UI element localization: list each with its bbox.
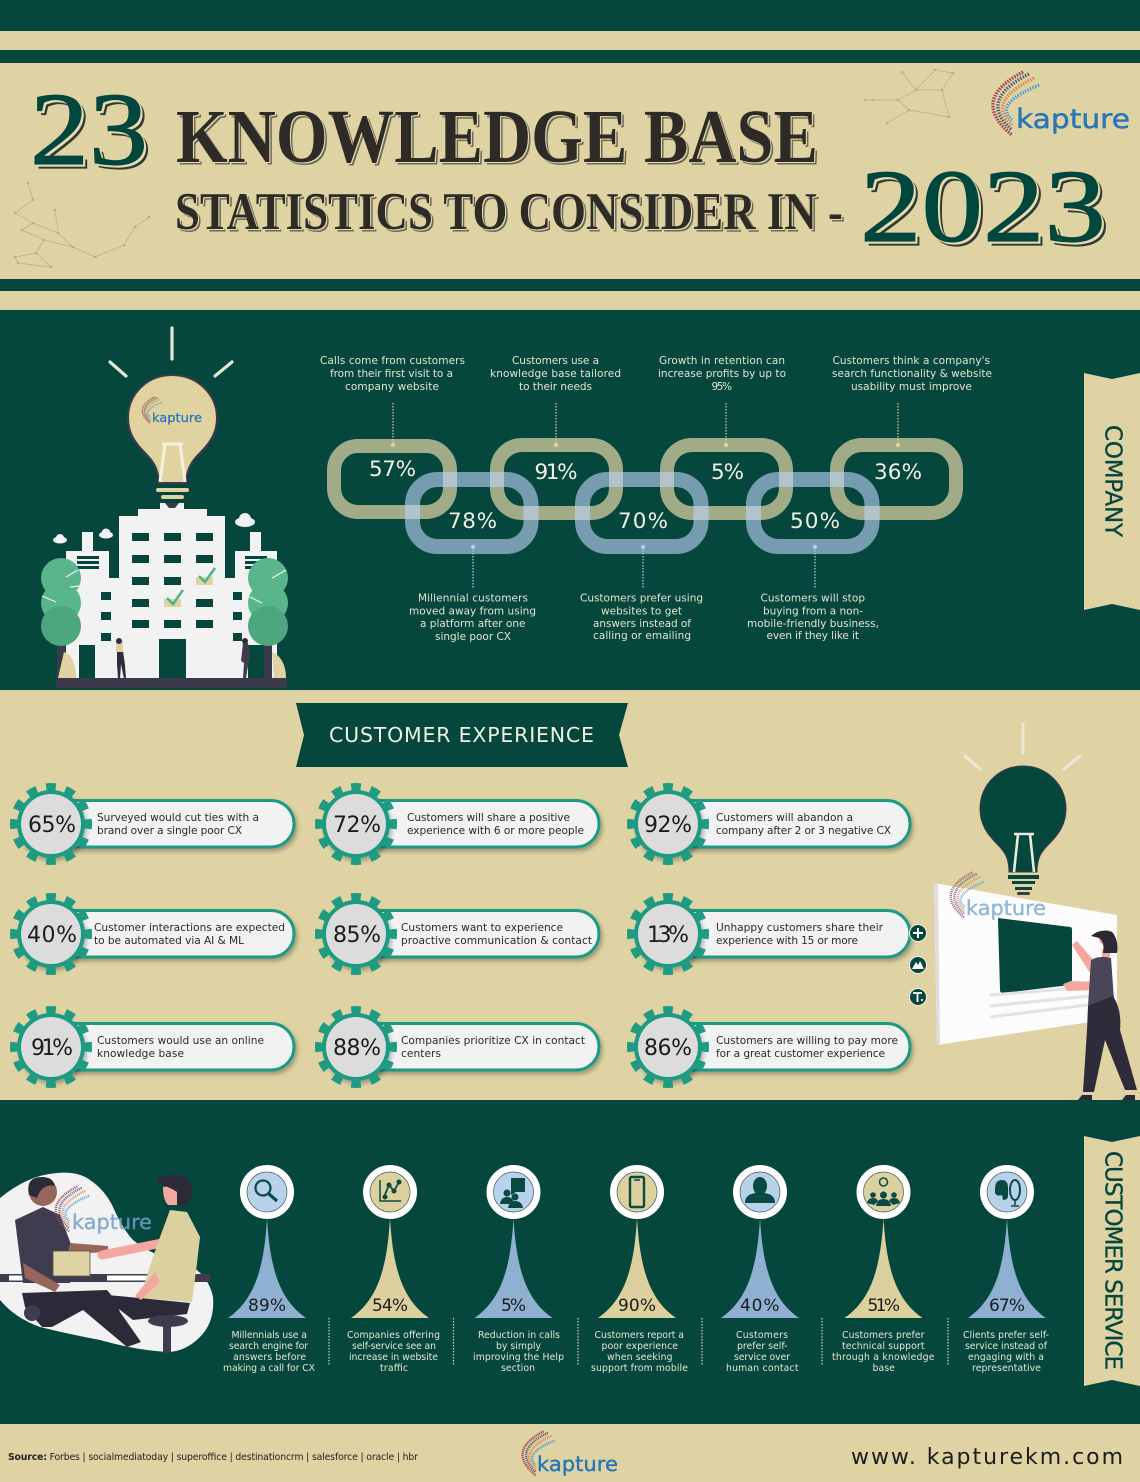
stat: 54% (347, 1168, 440, 1374)
card: 85%: 85% (333, 923, 381, 948)
kapture logo, top right: kapture (1016, 104, 1130, 135)
card: 40%: 40% (27, 923, 77, 948)
stat: 51%: through a knowledge (832, 1352, 935, 1363)
card: 85% (320, 898, 599, 970)
trees (41, 558, 288, 678)
card: 92%: company after 2 or 3 negative CX (716, 825, 891, 837)
source line: Source: Forbes | socialmediatoday | superoffice | destinationcrm | salesforce | oracle | hbr (8, 1452, 418, 1463)
company percentages: 70% (618, 509, 668, 534)
text: 57% calls from customers (320, 355, 465, 393)
stat: 51% (832, 1168, 935, 1374)
decorative molecule right (865, 70, 953, 123)
card: 13% (632, 898, 910, 970)
card: 91%: Customers would use an online (97, 1035, 264, 1047)
text: 91% knowledge base: knowledge base tailored (490, 368, 621, 380)
stat: 40% (721, 1168, 799, 1374)
text: 36% search (832, 355, 992, 393)
card: 88% (320, 1010, 599, 1084)
card: 65%: 65% (28, 813, 76, 838)
text: 70% websites: Customers prefer using (580, 592, 703, 604)
stat: 90%: 90% (618, 1296, 656, 1316)
stat: 89%: 89% (248, 1296, 286, 1316)
text: 5% retention: 95% (712, 381, 732, 393)
company percentages: 78% (448, 509, 497, 534)
icon: magnifier (256, 1180, 277, 1201)
company percentages: 50% (790, 509, 840, 534)
stat: 67% (963, 1168, 1049, 1374)
seated person right (102, 1175, 200, 1353)
rays (110, 328, 232, 376)
footer (8, 1431, 1123, 1476)
card: 85%: Customers want to experience (401, 922, 563, 934)
kapture logo, footer: kapture (537, 1452, 618, 1476)
card: 13%: experience with 15 or more (716, 935, 858, 947)
card: 72%: Customers will share a positive (407, 812, 570, 824)
ribbon: company (1084, 373, 1140, 610)
heading banner: customer experience (296, 703, 628, 767)
kapture logo on illustration: kapture (72, 1210, 152, 1234)
card: 65% (14, 788, 294, 860)
text: 50% mobile: even if they like it (766, 630, 859, 642)
illustration: handshake over laptop (0, 1173, 213, 1353)
card: 88%: 88% (333, 1036, 381, 1061)
stat: 40%: 40% (740, 1296, 780, 1316)
card: 92%: 92% (644, 813, 692, 838)
stat: 67%: Clients prefer self- (963, 1330, 1049, 1341)
website: www. kapturekm.com (851, 1445, 1123, 1470)
illustration: dark lightbulb and presenter at whiteboard (910, 724, 1137, 1100)
stat: 90%: when seeking (607, 1352, 673, 1363)
stat: 67%: engaging with a (968, 1352, 1044, 1363)
title number 23: 23 (30, 72, 148, 187)
ribbon: customer service (1084, 1136, 1140, 1386)
panel: customer service (0, 1100, 1140, 1424)
icon: head and mirror (995, 1180, 1020, 1206)
text: 57% calls from customers: Calls come from customers (320, 355, 465, 367)
seated person left (15, 1177, 141, 1347)
card: 91%: 91% (31, 1036, 73, 1061)
text: 5% retention: Growth in retention can (659, 355, 785, 367)
stat: 67%: 67% (989, 1296, 1025, 1316)
text: 57% calls from customers: from their first visit to a (330, 368, 453, 380)
text: 5% retention: increase profits by up to (658, 368, 786, 380)
card: 85%: proactive communication & contact (401, 935, 592, 947)
text: 78% millennials (409, 592, 536, 643)
title year 2023: 2023 (860, 149, 1106, 264)
text: 50% mobile: buying from a non- (763, 606, 863, 618)
text: 50% mobile (747, 592, 879, 642)
dotted column separators (329, 1318, 948, 1366)
stat: 51%: technical support (842, 1341, 925, 1352)
card: 13%: Unhappy customers share their (716, 922, 884, 934)
chain of linked stat rings (334, 445, 956, 546)
rays (965, 724, 1080, 769)
card: 65%: Surveyed would cut ties with a (97, 812, 259, 824)
title: knowledge base: KNOWLEDGE BASE (176, 95, 818, 179)
stat: 5% (473, 1168, 564, 1374)
stat: 67%: representative (972, 1363, 1041, 1374)
card: 86% (632, 1010, 910, 1084)
text: 70% websites: answers instead of (593, 618, 691, 630)
icon: lightbulb (128, 375, 217, 499)
stat: 54%: traffic (380, 1363, 408, 1374)
stat: 90% (591, 1168, 688, 1374)
icon: team with idea (867, 1178, 900, 1206)
text: 91% knowledge base: to their needs (519, 381, 592, 393)
stat: 89%: answers before (233, 1352, 306, 1363)
company percentages: 36% (874, 460, 922, 485)
text: 78% millennials: moved away from using (409, 606, 536, 618)
text: 70% websites: calling or emailing (593, 630, 691, 642)
card: 91%: knowledge base (97, 1048, 184, 1060)
card: 40% (14, 898, 294, 970)
company percentages: 5% (711, 460, 744, 485)
text: 78% millennials: a platform after one (420, 618, 526, 630)
ground (56, 678, 287, 688)
heading banner: customer experience: CUSTOMER EXPERIENCE (329, 723, 594, 747)
text: 36% search: Customers think a company's (832, 355, 990, 367)
presenter (1063, 930, 1137, 1100)
stat: 5%: section (501, 1363, 535, 1374)
whiteboard (934, 883, 1117, 1045)
stat: 51%: 51% (868, 1296, 900, 1316)
stat: 5%: Reduction in calls (478, 1330, 560, 1341)
card: 91% (14, 1010, 294, 1084)
laptop (53, 1251, 90, 1276)
kapture logo on whiteboard (951, 872, 1046, 920)
stat: 89%: search engine for (229, 1341, 308, 1352)
company percentages: 91% (534, 460, 578, 485)
stat: 5%: improving the Help (473, 1352, 564, 1363)
text: 57% calls from customers: company website (345, 381, 439, 393)
ribbon: company: COMPANY (1100, 425, 1126, 538)
text: 78% millennials: Millennial customers (418, 592, 528, 604)
toolbar icon: plus (910, 924, 926, 942)
stat: 54%: self-service see an (352, 1341, 436, 1352)
text: 36% search: search functionality & website (832, 368, 992, 380)
card: 88%: centers (401, 1048, 441, 1060)
stat: 51%: Customers prefer (842, 1330, 925, 1341)
kapture logo, top right (993, 72, 1130, 135)
text: 70% websites: websites to get (601, 606, 682, 618)
stat: 5%: 5% (501, 1296, 526, 1316)
icon: mobile phone (630, 1177, 644, 1207)
card: 72% (320, 788, 599, 860)
card: 92%: Customers will abandon a (716, 812, 853, 824)
decorative molecule left (15, 183, 149, 267)
card: 13%: 13% (647, 923, 689, 948)
text: 5% retention (658, 355, 786, 393)
text: 91% knowledge base (490, 355, 621, 393)
icon: user (745, 1177, 775, 1203)
stat: 89%: making a call for CX (223, 1363, 316, 1374)
card: 92% (632, 788, 910, 860)
stat: 40%: human contact (726, 1363, 799, 1374)
kapture logo on illustration (56, 1186, 152, 1234)
stat: 89% (223, 1168, 316, 1374)
panel: customer experience stat cards (14, 788, 910, 1084)
company percentages: 57% (369, 457, 416, 482)
card: 86%: for a great customer experience (716, 1048, 885, 1060)
ribbon: customer service: CUSTOMER SERVICE (1100, 1151, 1126, 1370)
icon: dark lightbulb (980, 766, 1066, 895)
card: 72%: experience with 6 or more people (407, 825, 584, 837)
people (116, 638, 250, 679)
building (66, 503, 277, 678)
card: 40%: to be automated via AI & ML (94, 935, 244, 947)
stat: 90%: Customers report a (594, 1330, 684, 1341)
text: 50% mobile: Customers will stop (760, 592, 865, 604)
stat: 67%: service instead of (965, 1341, 1048, 1352)
kapture logo on whiteboard: kapture (966, 896, 1046, 920)
panel: company (0, 310, 1140, 690)
text: 70% websites (580, 592, 703, 642)
icon: question bubble with people (500, 1178, 525, 1208)
stat: 54%: Companies offering (347, 1330, 440, 1341)
stat: 40%: Customers (736, 1330, 788, 1341)
toolbar icon: text (910, 988, 926, 1006)
stat: 5%: by simply (496, 1341, 541, 1352)
stat: 40%: service over (734, 1352, 790, 1363)
kapture logo, footer (523, 1431, 618, 1476)
stat: 89%: Millennials use a (232, 1330, 307, 1341)
card: 72%: 72% (333, 813, 381, 838)
stat: 40%: prefer self- (737, 1341, 788, 1352)
company illustration: building with lightbulb (41, 328, 288, 688)
subtitle: statistics to consider in: STATISTICS TO CONSIDER IN - (175, 183, 843, 241)
company percentages (369, 457, 922, 534)
card: 86%: 86% (644, 1036, 692, 1061)
stat: 54%: increase in website (349, 1352, 438, 1363)
card: 40%: Customer interactions are expected (94, 922, 285, 934)
text: 91% knowledge base: Customers use a (512, 355, 599, 367)
stat: 90%: support from mobile (591, 1363, 688, 1374)
stat: 90%: poor experience (602, 1341, 678, 1352)
toolbar icon: image (910, 956, 926, 974)
card: 88%: Companies prioritize CX in contact (401, 1035, 585, 1047)
kapture logo in bulb: kapture (152, 411, 202, 425)
text: 78% millennials: single poor CX (435, 631, 511, 643)
clouds (53, 513, 255, 544)
card: 65%: brand over a single poor CX (97, 825, 242, 837)
text: 36% search: usability must improve (851, 381, 972, 393)
dotted connectors (391, 403, 900, 588)
stat: 51%: base (872, 1363, 895, 1374)
stat: 54%: 54% (372, 1296, 408, 1316)
card: 86%: Customers are willing to pay more (716, 1035, 898, 1047)
text: 50% mobile: mobile-friendly business, (747, 618, 879, 630)
icon: line chart (380, 1180, 401, 1201)
